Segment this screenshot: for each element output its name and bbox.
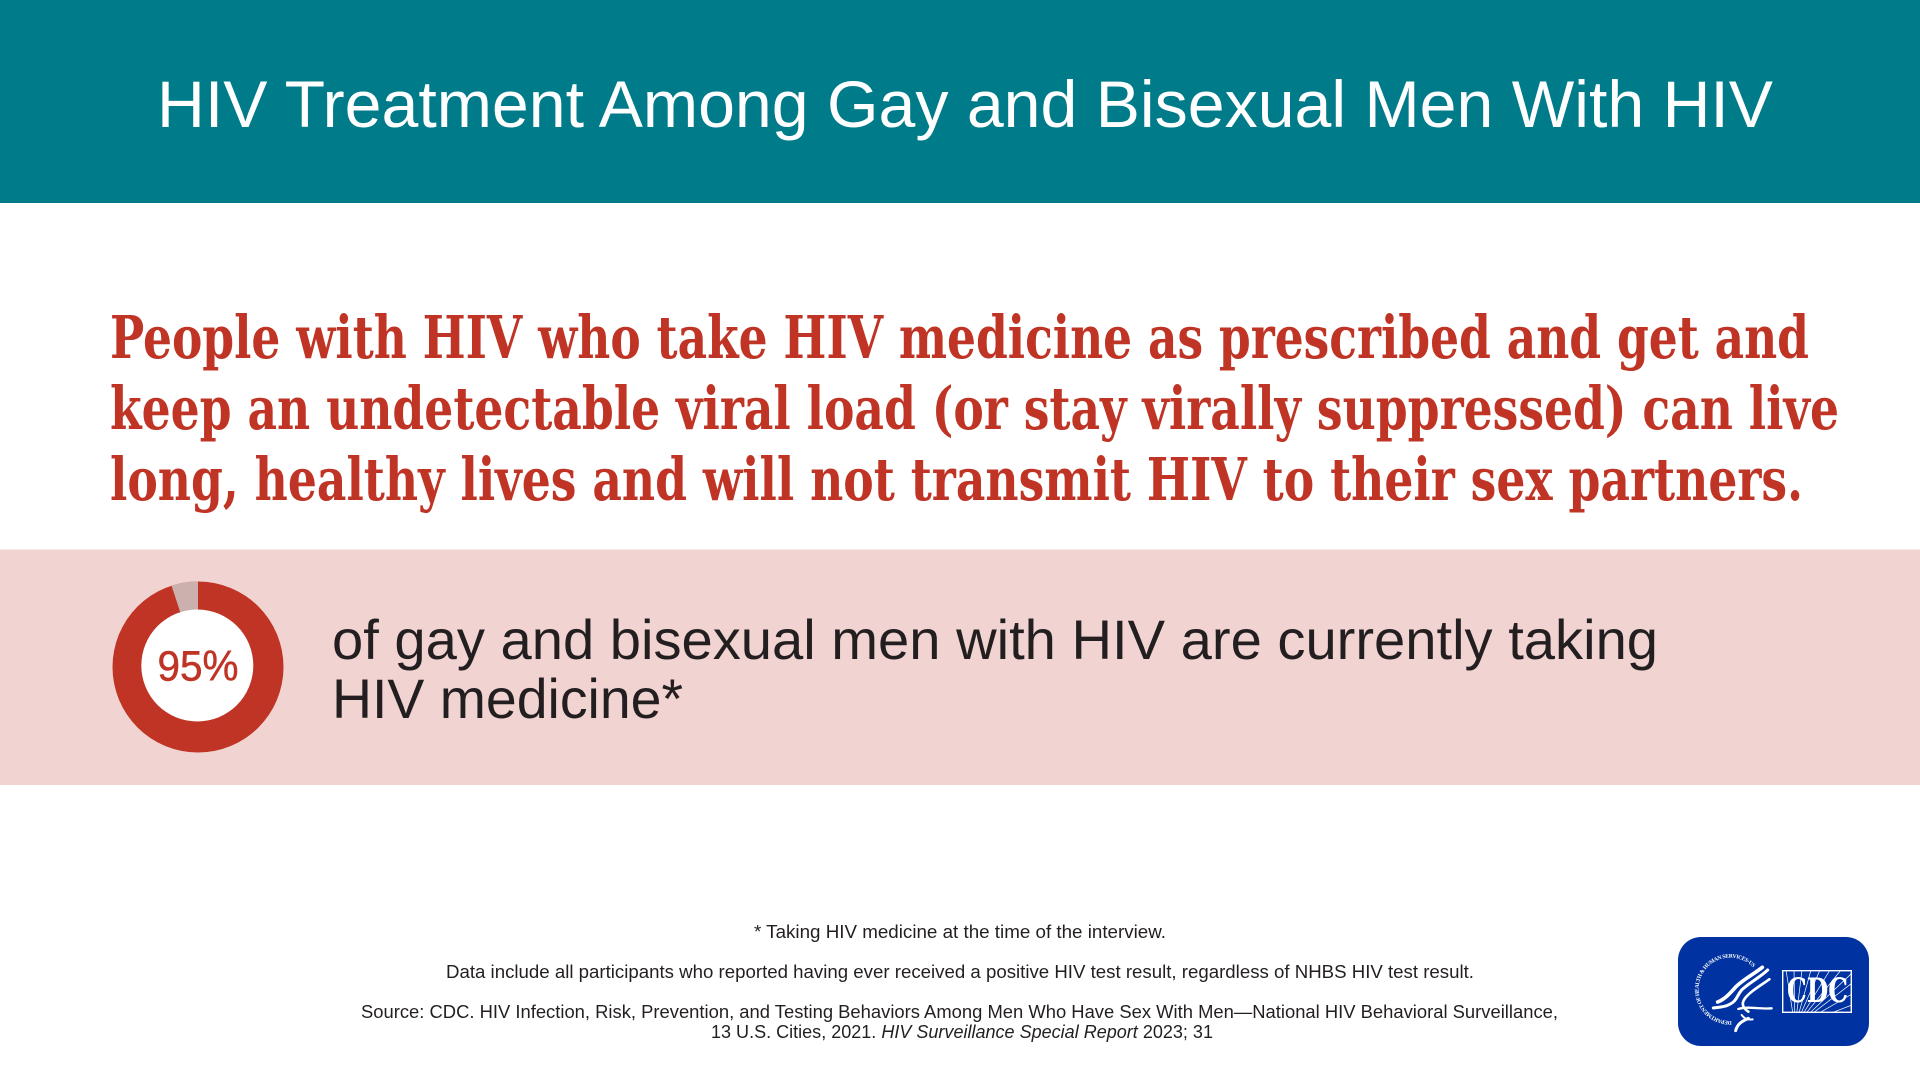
footnotes and source: Data include all participants who reported having ever received a positive HIV test result, regardless of NHBS HIV test result. bbox=[446, 962, 1474, 982]
footnotes and source: 13 U.S. Cities, 2021. HIV Surveillance Special Report 2023; 31 bbox=[711, 1022, 1213, 1042]
icon: HHS seal ring text: DEPARTMENT OF HEALTH & HUMAN SERVICES·USA bbox=[1694, 954, 1756, 1025]
icon: CDC box bbox=[1782, 970, 1852, 1013]
footnotes and source: * Taking HIV medicine at the time of the interview. bbox=[754, 922, 1166, 942]
header banner bbox=[0, 0, 1920, 203]
donut value: 95% bbox=[158, 642, 238, 690]
title: HIV Treatment Among Gay and Bisexual Men With HIV bbox=[157, 67, 1773, 141]
logo: HHS and CDC bbox=[1678, 937, 1869, 1046]
footnotes and source bbox=[361, 922, 1558, 1042]
statistic text: HIV medicine* bbox=[332, 667, 683, 730]
icon: CDC box: CDC bbox=[1787, 971, 1848, 1011]
footnotes and source: Source: CDC. HIV Infection, Risk, Prevention, and Testing Behaviors Among Men Who Have Sex With Men—National HIV Behavioral Surveillance, bbox=[361, 1002, 1558, 1022]
panel: statistic band bbox=[0, 550, 1920, 785]
statistic text bbox=[332, 608, 1658, 730]
key message bbox=[110, 303, 1839, 514]
donut chart: 95% bbox=[112, 582, 284, 752]
statistic text: of gay and bisexual men with HIV are currently taking bbox=[332, 608, 1658, 671]
icon: HHS eagle bbox=[1713, 967, 1772, 1031]
